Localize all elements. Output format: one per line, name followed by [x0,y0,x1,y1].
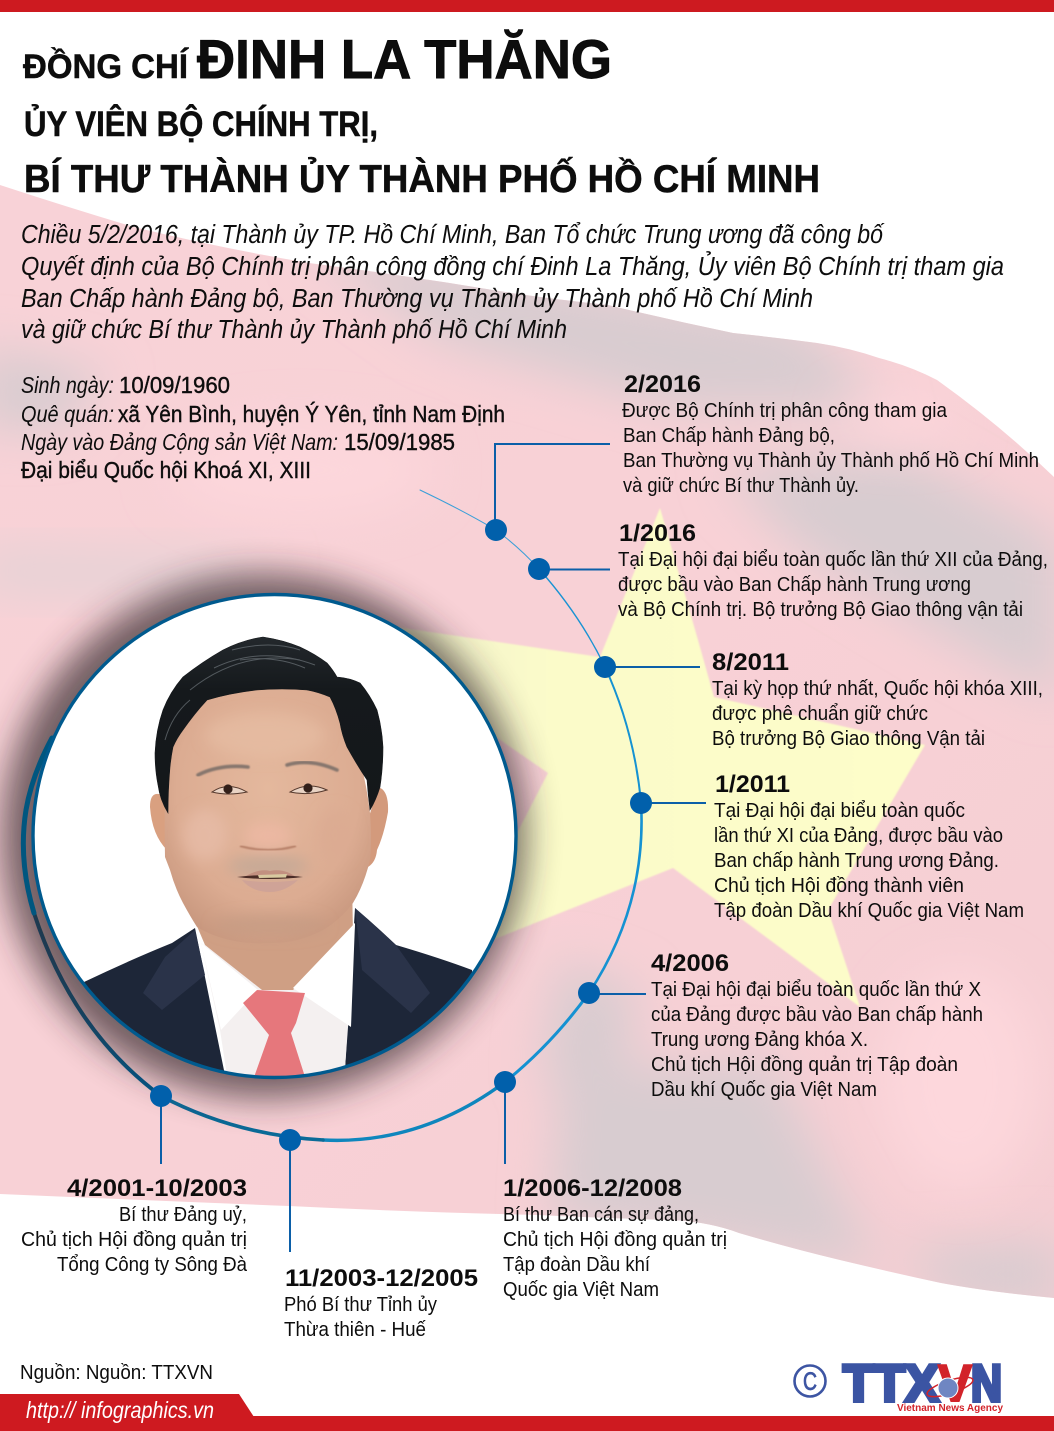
portrait ring [33,594,516,1078]
event 1/2006-12/2008: Quốc gia Việt Nam [503,1278,659,1301]
mouth [237,870,303,892]
title: ỦY VIÊN BỘ CHÍNH TRỊ, [24,104,378,144]
title: BÍ THƯ THÀNH ỦY THÀNH PHỐ HỒ CHÍ MINH [24,156,820,201]
title: ĐINH LA THĂNG [197,28,612,90]
footer band and url tab [0,1394,1054,1431]
event 4/2006 [651,950,983,1101]
suit [84,908,472,1070]
title: ĐỒNG CHÍ [23,48,190,86]
nose [240,846,296,850]
timeline nodes [150,519,652,1151]
hair highlights [165,645,315,740]
hair [155,637,383,813]
event 1/2006-12/2008 [503,1175,727,1301]
source note: Nguồn: Nguồn: TTXVN [20,1361,213,1384]
event 8/2011: Bộ trưởng Bộ Giao thông Vận tải [712,727,985,750]
TTXVN logo [843,1355,1003,1414]
portrait shadow [2,574,526,1098]
event 4/2001-10/2003: Bí thư Đảng uỷ, [119,1203,247,1226]
event 1/2011: Ban chấp hành Trung ương Đảng. [714,849,999,872]
tie [243,990,306,1080]
event 1/2006-12/2008: Bí thư Ban cán sự đảng, [503,1203,699,1226]
personal details: Quê quán: [21,401,114,427]
personal details: 10/09/1960 [119,372,230,398]
event 1/2011 [714,771,1024,922]
event 8/2011: 8/2011 [712,649,789,676]
event 4/2001-10/2003 [21,1175,248,1276]
event 8/2011 [712,649,1043,750]
event 4/2001-10/2003: Tổng Công ty Sông Đà [57,1253,248,1276]
event 1/2011: Chủ tịch Hội đồng thành viên [714,874,964,897]
intro text: Quyết định của Bộ Chính trị phân công đồng chí Đinh La Thăng, Ủy viên Bộ Chính trị tham gia [21,250,1004,281]
personal details: Đại biểu Quốc hội Khoá XI, XIII [21,457,311,483]
copyright symbol [794,1366,826,1396]
personal details: Sinh ngày: [21,372,114,398]
event 1/2011: lần thứ XI của Đảng, được bầu vào [714,824,1003,847]
event 2/2016: Ban Chấp hành Đảng bộ, [623,424,835,447]
eyes [212,783,327,794]
shirt [201,923,355,1082]
event 2/2016: Được Bộ Chính trị phân công tham gia [622,399,948,422]
yellow star [320,508,925,1007]
event 1/2006-12/2008: 1/2006-12/2008 [503,1175,682,1202]
personal details: Ngày vào Đảng Cộng sản Việt Nam: [21,429,338,455]
event 1/2016 [618,520,1048,621]
event 1/2006-12/2008: Chủ tịch Hội đồng quản trị [503,1228,727,1251]
event 4/2006: Chủ tịch Hội đồng quản trị Tập đoàn [651,1053,958,1076]
event 4/2006: Tại Đại hội đại biểu toàn quốc lần thứ X [651,978,981,1001]
event 1/2016: được bầu vào Ban Chấp hành Trung ương [618,573,971,596]
face shading [183,721,315,928]
right ear [368,788,388,867]
event 1/2011: 1/2011 [715,771,790,798]
TTXVN logo: Vietnam News Agency [897,1403,1003,1414]
event 11/2003-12/2005: Thừa thiên - Huế [284,1318,427,1341]
event 11/2003-12/2005: Phó Bí thư Tỉnh ủy [284,1293,438,1316]
event 1/2011: Tại Đại hội đại biểu toàn quốc [714,799,965,822]
intro text: Chiều 5/2/2016, tại Thành ủy TP. Hồ Chí Minh, Ban Tổ chức Trung ương đã công bố [21,221,886,249]
portrait photo [30,590,520,1090]
event 2/2016: 2/2016 [624,371,701,398]
eyebrows [198,762,337,775]
title [23,28,820,201]
event 4/2001-10/2003: Chủ tịch Hội đồng quản trị [21,1228,247,1251]
event 1/2016: 1/2016 [619,520,696,547]
event 4/2006: Trung ương Đảng khóa X. [651,1028,868,1051]
TTXVN logo: N [971,1355,1002,1413]
personal details: xã Yên Bình, huyện Ý Yên, tỉnh Nam Định [118,401,505,427]
copyright symbol: C [803,1368,817,1396]
collar [201,923,355,1030]
lapels [143,908,430,1013]
event 11/2003-12/2005: 11/2003-12/2005 [285,1265,478,1292]
background flag [0,180,1054,1310]
event 11/2003-12/2005 [284,1265,478,1341]
event 1/2011: Tập đoàn Dầu khí Quốc gia Việt Nam [714,899,1024,922]
footer band and url tab: http:// infographics.vn [26,1397,214,1423]
connector lines [161,444,706,1252]
intro text: Ban Chấp hành Đảng bộ, Ban Thường vụ Thành ủy Thành phố Hồ Chí Minh [21,285,813,313]
event 2/2016 [622,371,1039,497]
event 4/2006: của Đảng được bầu vào Ban chấp hành [651,1003,983,1026]
TTXVN logo: TTX [843,1355,939,1413]
intro text: và giữ chức Bí thư Thành ủy Thành phố Hồ Chí Minh [21,316,567,344]
event 4/2001-10/2003: 4/2001-10/2003 [67,1175,247,1202]
personal details [21,372,505,483]
event 4/2006: 4/2006 [651,950,729,977]
left ring arc [23,738,52,913]
event 8/2011: được phê chuẩn giữ chức [712,702,928,725]
TTXVN logo: V [938,1355,972,1413]
neck [197,904,353,990]
face [165,686,371,943]
top red band [0,0,1054,12]
event 4/2006: Dầu khí Quốc gia Việt Nam [651,1078,877,1101]
event 1/2006-12/2008: Tập đoàn Dầu khí [503,1253,650,1276]
timeline arc [34,490,642,1140]
intro text [21,221,1004,344]
event 1/2016: và Bộ Chính trị. Bộ trưởng Bộ Giao thông vận tải [618,598,1023,621]
left ear [150,794,165,848]
event 2/2016: và giữ chức Bí thư Thành ủy. [623,474,859,497]
personal details: 15/09/1985 [344,429,455,455]
